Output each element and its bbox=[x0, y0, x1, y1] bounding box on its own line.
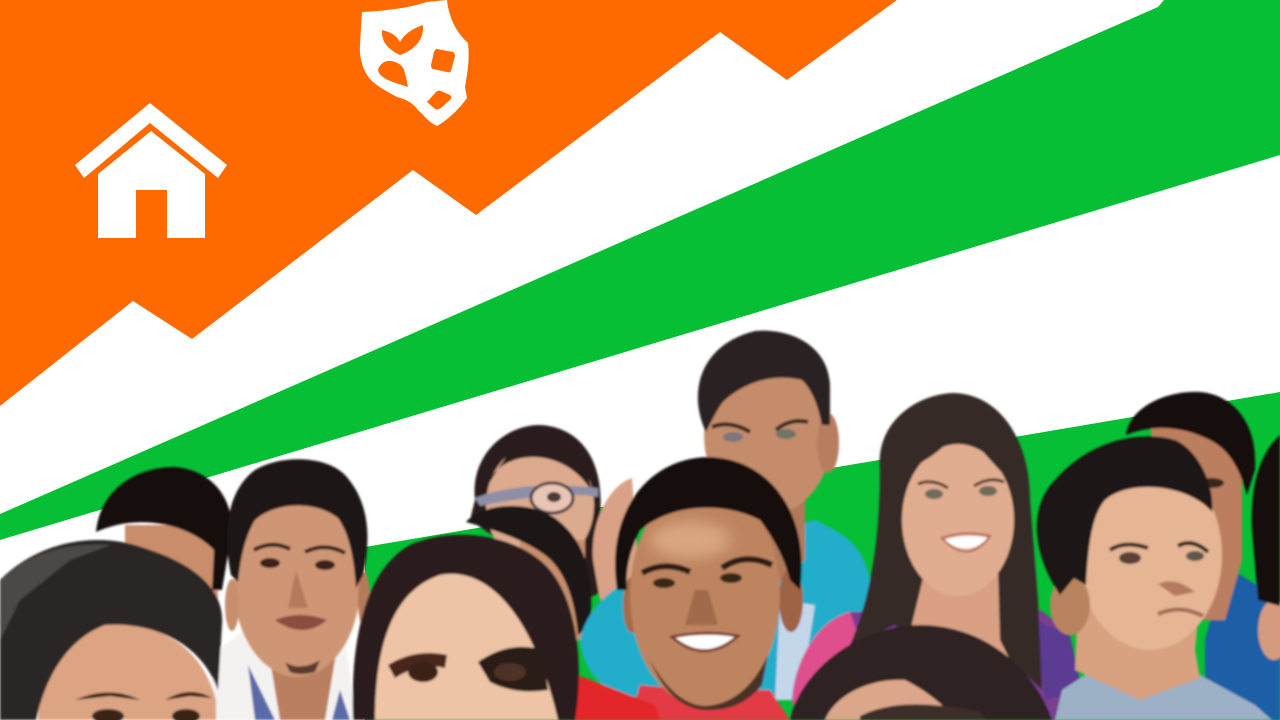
person: front left man bbox=[0, 540, 222, 720]
person: woman with glasses bbox=[470, 425, 605, 600]
person: smiling centre man bbox=[615, 457, 803, 720]
person: man behind centre bbox=[466, 478, 640, 640]
person: far right cropped man bbox=[1252, 435, 1280, 660]
green upper band bbox=[0, 0, 1280, 540]
person: man looking up bbox=[1037, 436, 1272, 720]
icon: house bbox=[75, 103, 227, 238]
person: woman with long hair bbox=[792, 393, 1082, 720]
person: man in teal shirt bbox=[580, 331, 872, 700]
person: man in white shirt bbox=[212, 459, 370, 720]
crowd of people bbox=[0, 331, 1280, 720]
person: far right back man in blue shirt bbox=[1126, 392, 1280, 720]
person: back left man bbox=[96, 467, 232, 610]
person: bottom centre woman bbox=[790, 625, 1052, 720]
orange mountain band bbox=[0, 0, 897, 406]
icon: leaf emblem bbox=[360, 0, 469, 126]
person: front woman with red shirt bbox=[353, 535, 660, 720]
green lower band bbox=[365, 392, 1280, 720]
